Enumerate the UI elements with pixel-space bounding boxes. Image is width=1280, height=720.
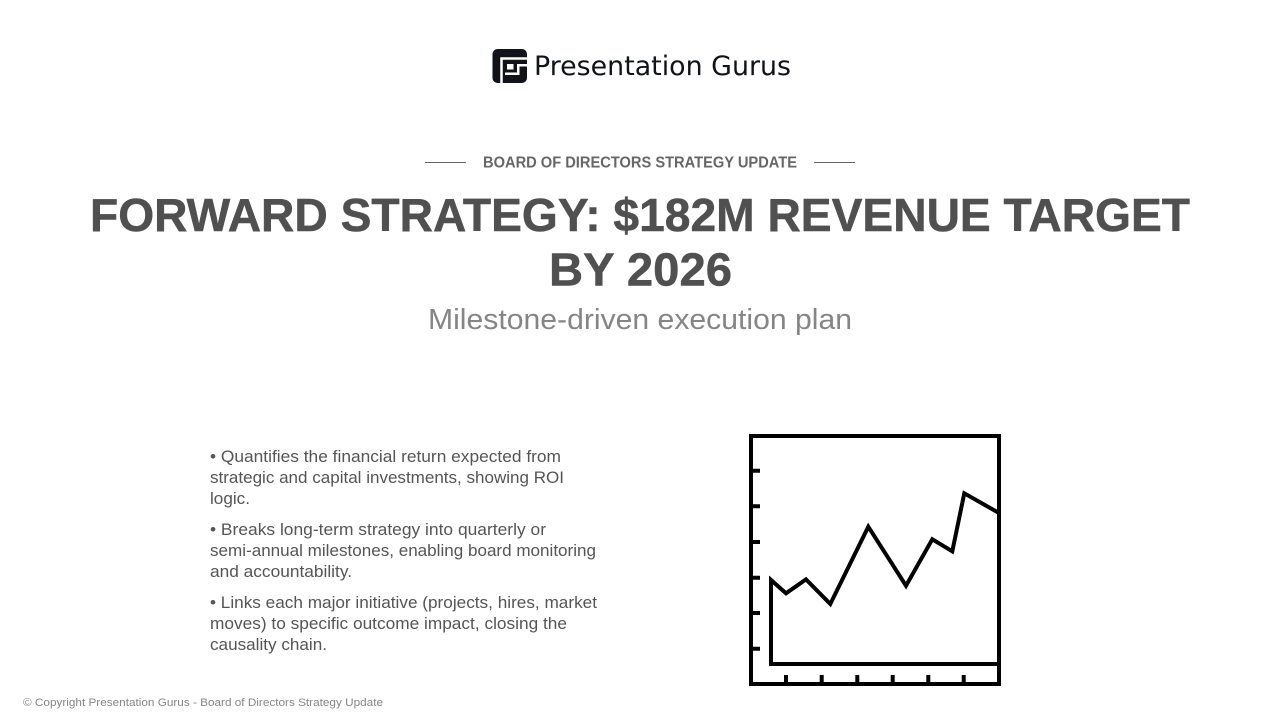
bullet: milestones: • Breaks long-term strategy into quarterly or: [210, 521, 547, 539]
bullet: milestones: [210, 521, 596, 581]
bullet: financial return: logic.: [210, 490, 250, 508]
icon: line chart: [751, 436, 999, 684]
bullet: causality: [210, 594, 597, 654]
bullet list: [210, 448, 597, 654]
bullet: milestones: and accountability.: [210, 563, 352, 581]
bullet: causality: • Links each major initiative (projects, hires, market: [210, 594, 597, 612]
subtitle: Milestone-driven execution plan: [428, 304, 852, 336]
logo: Presentation Gurus: [492, 49, 791, 84]
bullet: milestones: semi-annual milestones, enabling board monitoring: [210, 542, 596, 560]
bullet: financial return: strategic and capital investments, showing ROI: [210, 469, 564, 487]
bullet: causality: moves) to specific outcome impact, closing the: [210, 615, 567, 633]
footer copyright: © Copyright Presentation Gurus - Board of Directors Strategy Update: [23, 697, 383, 709]
title: FORWARD STRATEGY: $182M REVENUE TARGET: [90, 189, 1190, 241]
title: BY 2026: [549, 244, 732, 296]
bullet: financial return: [210, 448, 564, 508]
eyebrow heading with rules: BOARD OF DIRECTORS STRATEGY UPDATE: [483, 154, 797, 172]
title: [90, 189, 1190, 296]
bullet: causality: causality chain.: [210, 636, 327, 654]
bullet: financial return: • Quantifies the financial return expected from: [210, 448, 561, 466]
logo wordmark: Presentation Gurus: [534, 51, 791, 82]
icon: logo mark: [492, 49, 527, 84]
